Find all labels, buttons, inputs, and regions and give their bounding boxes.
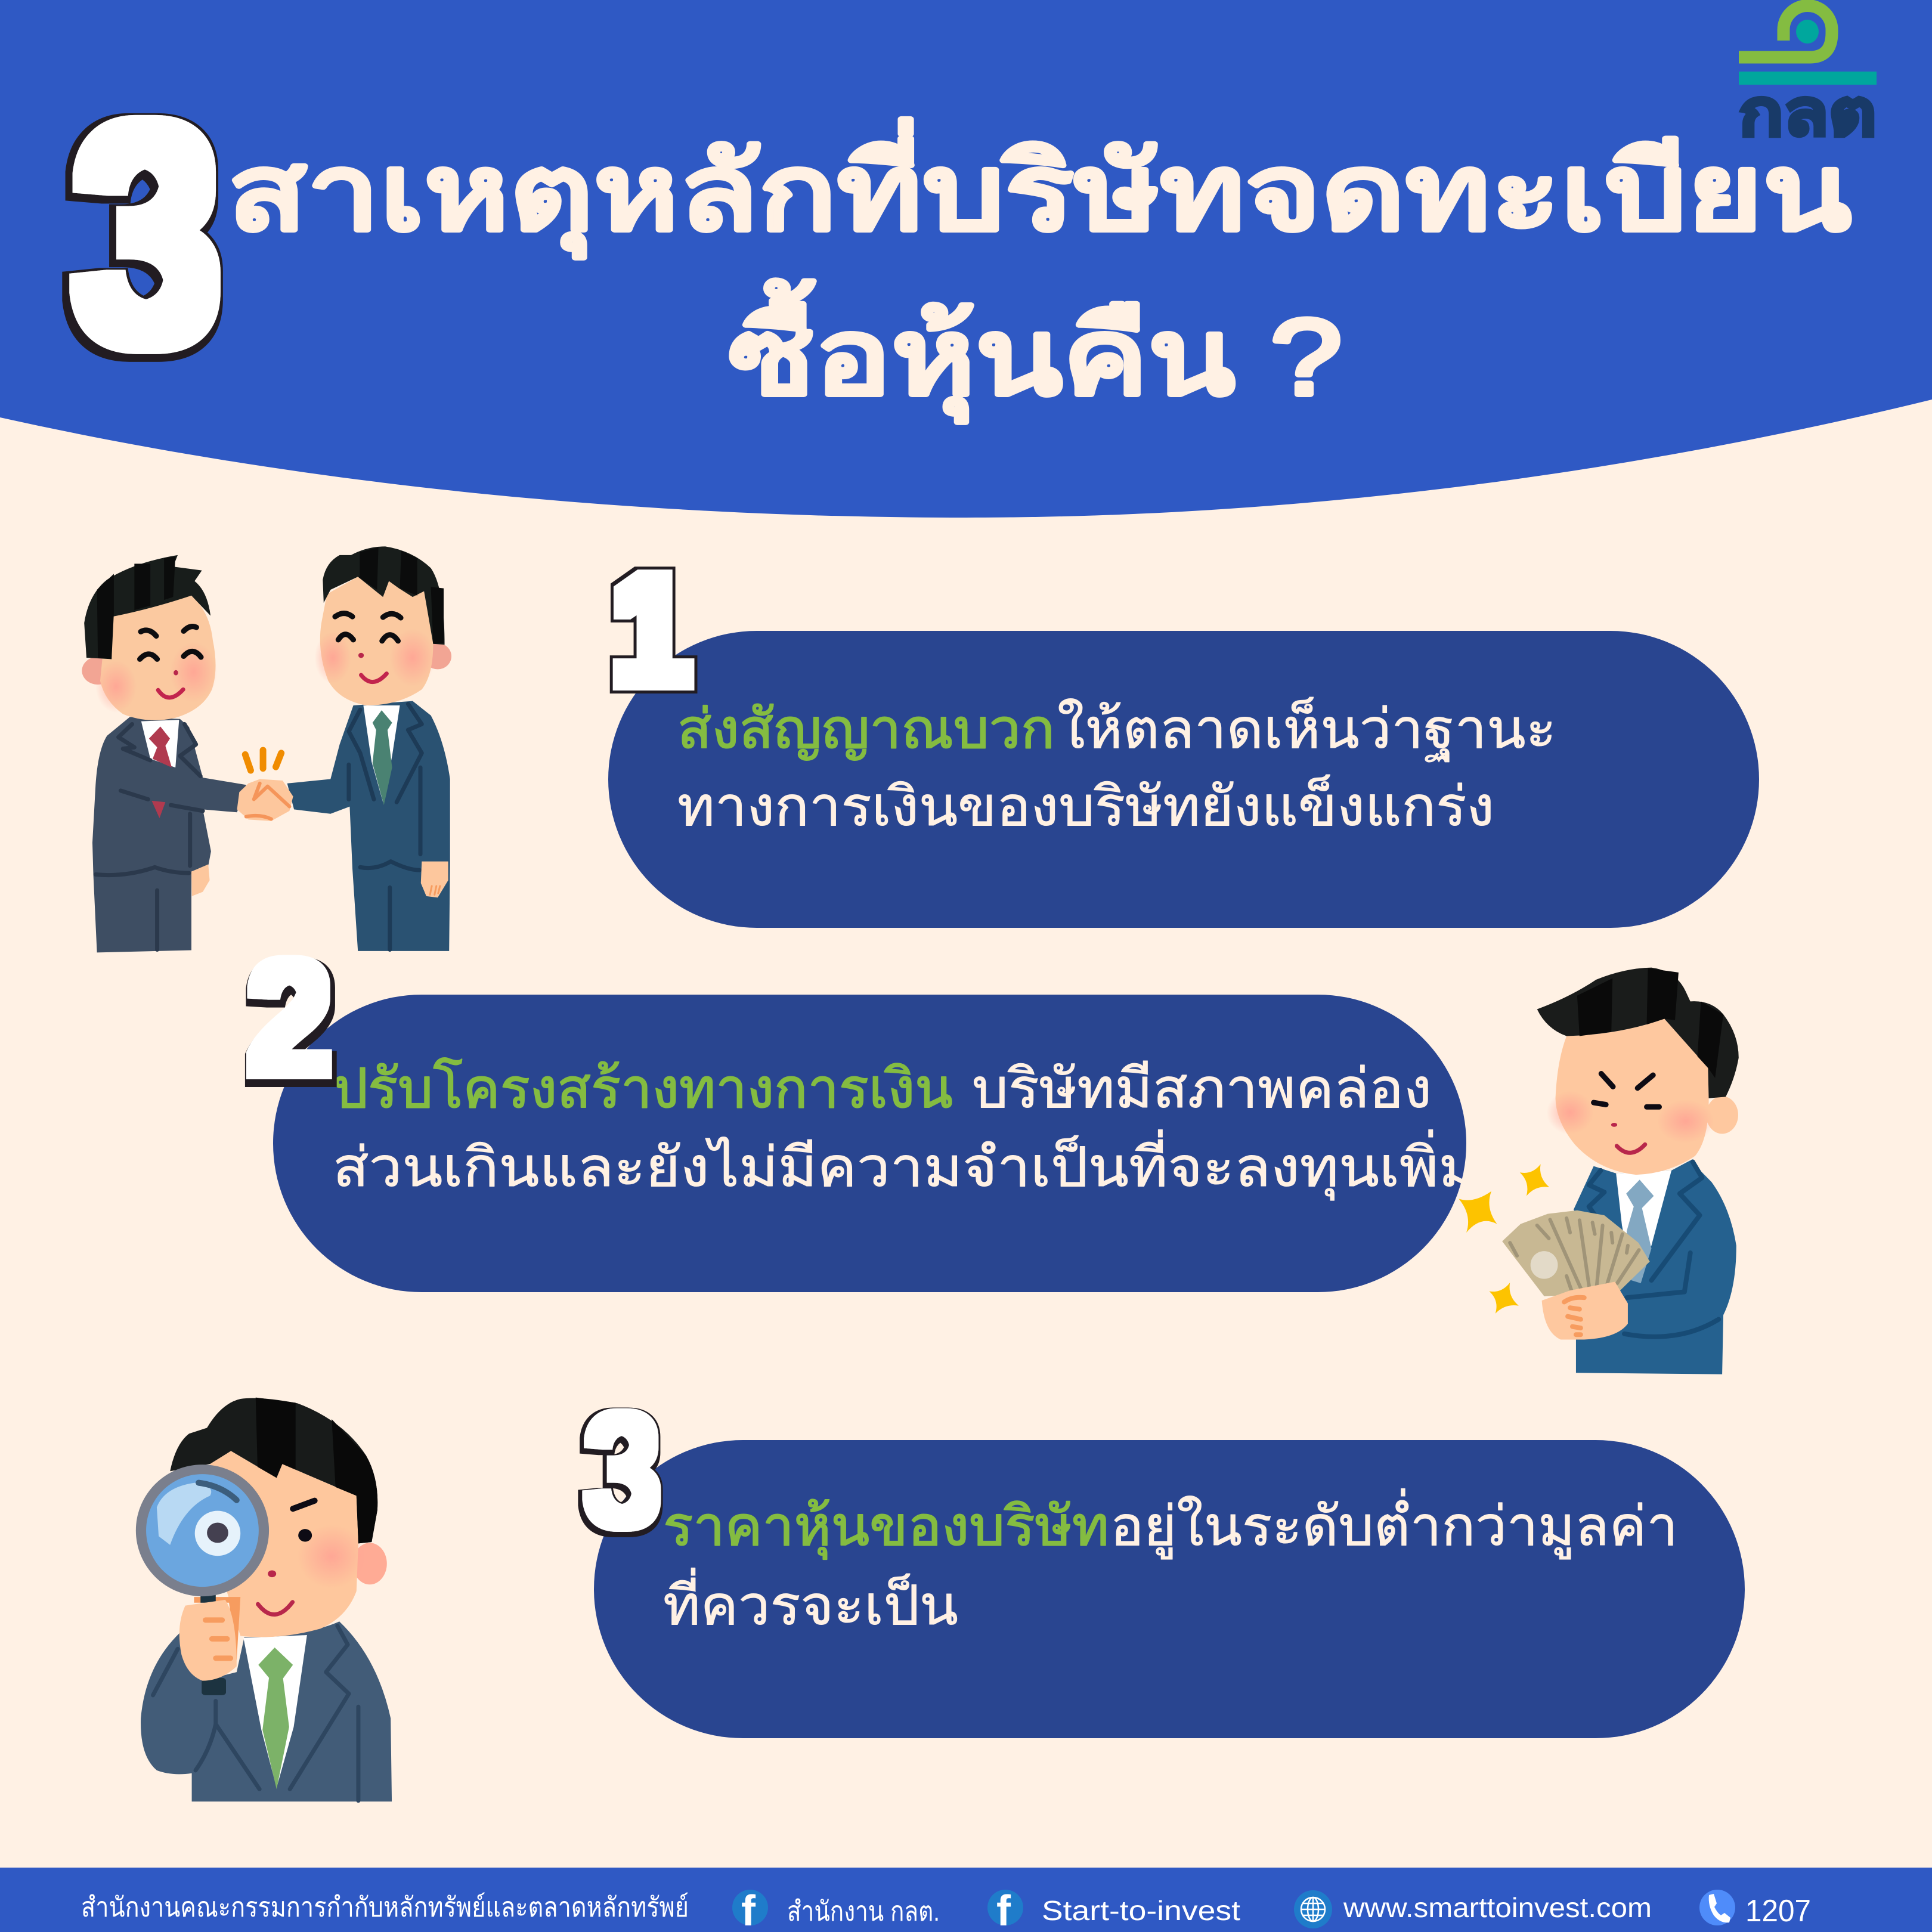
reason 2 text: บริษัทมีสภาพคล่อง (972, 1058, 1432, 1119)
handshake (237, 750, 293, 821)
right man (287, 546, 451, 951)
head (170, 1398, 387, 1637)
hand (179, 1600, 237, 1681)
reason 1 text: ให้ตลาดเห็นว่าฐานะ (1057, 696, 1556, 763)
number 1: 1 (612, 545, 690, 714)
left man (82, 555, 246, 952)
magnifying glass (136, 1465, 269, 1695)
reason 2 text: ส่วนเกินและยังไม่มีความจำเป็นที่จะลงทุนเพิ่ม (333, 1129, 1478, 1201)
reason 3 text: ราคาหุ้นของบริษัท (663, 1496, 1109, 1560)
reason 2 text: ปรับโครงสร้างทางการเงิน (333, 1058, 953, 1119)
logo: กลต (1739, 76, 1877, 148)
footer: website: www.smarttoinvest.com (1343, 1892, 1652, 1923)
title: ซื้อหุ้นคืน ? (728, 280, 1342, 422)
sparkles (1459, 1164, 1549, 1314)
panel: reason 3 (594, 1440, 1745, 1738)
icon: facebook (987, 1887, 1023, 1932)
reason 3 text (663, 1488, 1678, 1636)
suit (1574, 1160, 1736, 1374)
illustration: man with magnifying glass (136, 1398, 392, 1801)
icon: phone (1699, 1890, 1735, 1925)
footer: hotline: 1207 (1745, 1894, 1811, 1928)
title: สาเหตุหลักที่บริษัทจดทะเบียน (228, 119, 1852, 258)
footer: SEC page: สำนักงาน กลต. (787, 1896, 940, 1927)
shirt and tie (1616, 1171, 1671, 1283)
number 2: 2 (247, 928, 332, 1108)
footer: Start-to-invest: Start-to-invest (1042, 1895, 1240, 1926)
shirt and tie (243, 1635, 307, 1789)
head (1537, 968, 1739, 1175)
reason 1 text: ทางการเงินของบริษัทยังแข็งแกร่ง (677, 774, 1494, 837)
number 3 small: 3 (584, 1380, 661, 1560)
big number 3: 3 (73, 61, 221, 407)
reason 3 text: ที่ควรจะเป็น (663, 1568, 958, 1636)
reason 1 text: ส่งสัญญาณบวก (677, 699, 1055, 761)
footer: organisation name: สำนักงานคณะกรรมการกำกับหลักทรัพย์และตลาดหลักทรัพย์ (81, 1891, 689, 1922)
illustration: two businessmen shaking hands (82, 546, 451, 952)
footer bar (0, 1868, 1932, 1932)
suit (141, 1621, 392, 1801)
reason 2 text (333, 1058, 1478, 1201)
reason 1 text (677, 696, 1556, 837)
title (228, 119, 1852, 422)
reason 3 text: อยู่ในระดับต่ำกว่ามูลค่า (1110, 1488, 1678, 1559)
icon: facebook (732, 1887, 768, 1932)
panel: reason 2 (273, 995, 1478, 1292)
header banner (0, 0, 1932, 518)
banknotes (1502, 1210, 1650, 1296)
icon: globe (1294, 1890, 1332, 1928)
logo (1739, 5, 1877, 148)
illustration: man holding money (1459, 968, 1739, 1374)
hand (1542, 1282, 1628, 1339)
panel: reason 1 (608, 631, 1759, 928)
